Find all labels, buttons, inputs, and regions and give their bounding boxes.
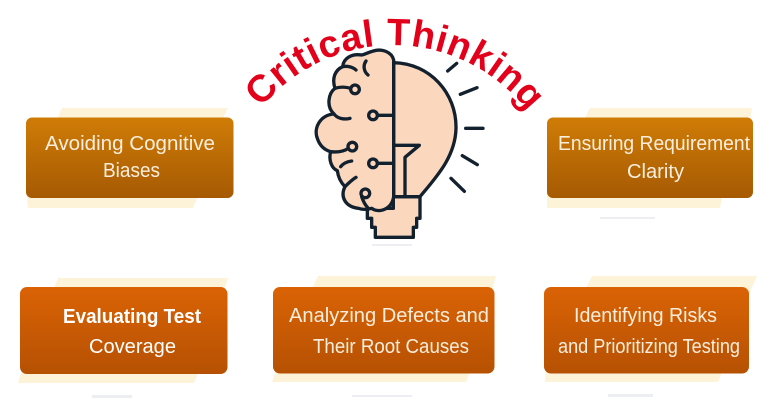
panel: Ensuring Requirement Clarity — [547, 108, 753, 208]
label: Avoiding Cognitive — [45, 133, 215, 155]
filament — [394, 145, 419, 197]
circuit lines — [378, 115, 394, 163]
panel: Evaluating Test Coverage — [18, 278, 228, 383]
label: Ensuring Requirement — [558, 133, 750, 155]
label: Their Root Causes — [313, 336, 469, 358]
faint reflections below panels — [92, 217, 655, 398]
bulb base — [367, 197, 420, 237]
label: Coverage — [89, 336, 176, 358]
label: and Prioritizing Testing — [558, 336, 740, 358]
light rays — [448, 63, 483, 191]
label: Evaluating Test — [63, 306, 201, 328]
panel: Avoiding Cognitive Biases — [26, 108, 234, 208]
brain fold lines — [331, 61, 368, 208]
label: Clarity — [627, 161, 684, 183]
brain left half — [316, 50, 394, 211]
label: Biases — [103, 160, 160, 182]
panel: Analyzing Defects and Their Root Causes — [272, 276, 496, 382]
bulb right half — [394, 63, 456, 197]
label: Analyzing Defects and — [289, 305, 489, 327]
label: Identifying Risks — [574, 305, 717, 327]
icon: half brain half light bulb — [316, 50, 483, 237]
title: Critical Thinking: Critical Thinking — [248, 18, 542, 112]
panel: Identifying Risks and Prioritizing Testing — [544, 276, 757, 382]
circuit nodes — [348, 85, 377, 198]
